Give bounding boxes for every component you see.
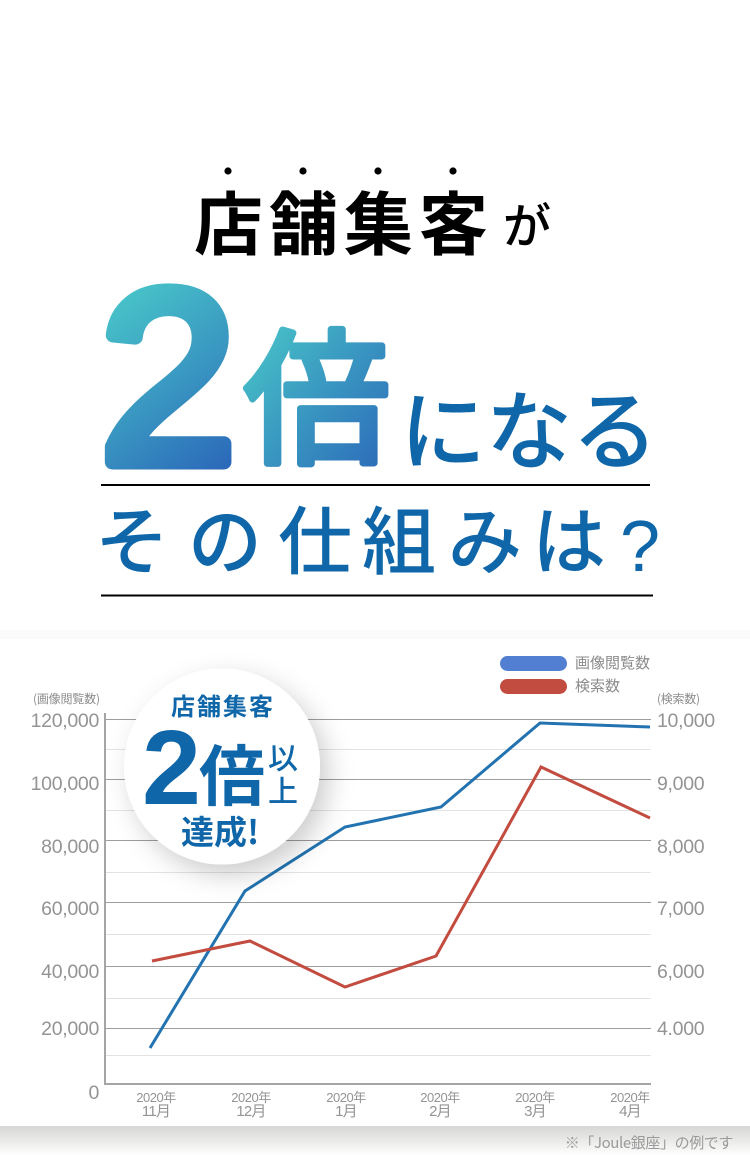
callout badge: 店舗集客2倍以上達成!: 2 [142,709,201,827]
right axis labels: 6,000 [657,961,705,983]
x axis labels: 2020年 [231,1090,271,1105]
x axis labels: 12月 [236,1103,266,1120]
legend: 検索数 [575,675,620,696]
heading text: 店舗集客 [194,169,494,269]
callout badge: 店舗集客2倍以上達成!: 店舗集客 [171,687,275,722]
x axis labels [136,1090,650,1120]
chart panel background [0,630,750,1156]
subheading: その仕組みは?: その仕組みは [95,483,606,590]
right axis labels: 10,000 [657,710,715,732]
line chart [31,690,715,1120]
right axis labels: 4.000 [657,1018,705,1040]
x axis labels: 2020年 [136,1090,176,1105]
line: 画像閲覧数 [150,723,650,1048]
right axis labels: 7,000 [657,898,705,920]
subheading: その仕組みは?: ? [620,507,660,587]
heading: 店舗集客が: が [503,187,551,257]
left axis labels: 60,000 [41,898,99,920]
left axis labels: 80,000 [41,836,99,858]
x axis labels: 3月 [524,1103,546,1120]
x axis labels: 11月 [142,1103,170,1120]
callout badge: 店舗集客2倍以上達成! [124,668,320,864]
big gradient 2倍: 倍 [244,284,390,495]
blue text: になる: になる [400,362,658,487]
left axis labels: 120,000 [31,710,99,732]
x axis labels: 2020年 [515,1090,555,1105]
x axis labels: 2020年 [420,1090,460,1105]
bottom rule [101,594,653,596]
left axis labels: 40,000 [41,961,99,983]
left axis labels: 100,000 [31,773,99,795]
callout badge: 店舗集客2倍以上達成!: 上 [268,767,298,811]
x axis labels: 2020年 [610,1090,650,1105]
callout badge: 店舗集客2倍以上達成!: 以 [268,734,298,778]
top rule [101,484,650,486]
heading: 店舗集客が [194,167,551,269]
left axis labels [31,710,99,1104]
x axis labels: 2月 [429,1103,451,1120]
emphasis dots [224,167,457,175]
right axis labels [657,710,715,1040]
legend: 画像閲覧数 [575,652,650,673]
legend [500,652,650,696]
left axis title: (画像閲覧数) [33,690,100,707]
right axis labels: 9,000 [657,773,705,795]
right axis labels: 8,000 [657,836,705,858]
callout badge: 店舗集客2倍以上達成!: 倍 [199,724,265,820]
x axis labels: 1月 [335,1103,357,1120]
left axis labels: 20,000 [41,1018,99,1040]
right axis title: (検索数) [657,690,700,707]
footnote: ※「Joule銀座」の例です [565,1132,733,1153]
x axis labels: 4月 [619,1103,641,1120]
left axis labels: 0 [88,1082,99,1104]
big gradient 2倍: 2 [100,240,236,514]
callout badge: 店舗集客2倍以上達成!: 達成! [181,806,259,854]
x axis labels: 2020年 [326,1090,366,1105]
line: 検索数 [152,767,650,987]
axes [105,713,651,1084]
big gradient 2倍 [100,240,390,514]
